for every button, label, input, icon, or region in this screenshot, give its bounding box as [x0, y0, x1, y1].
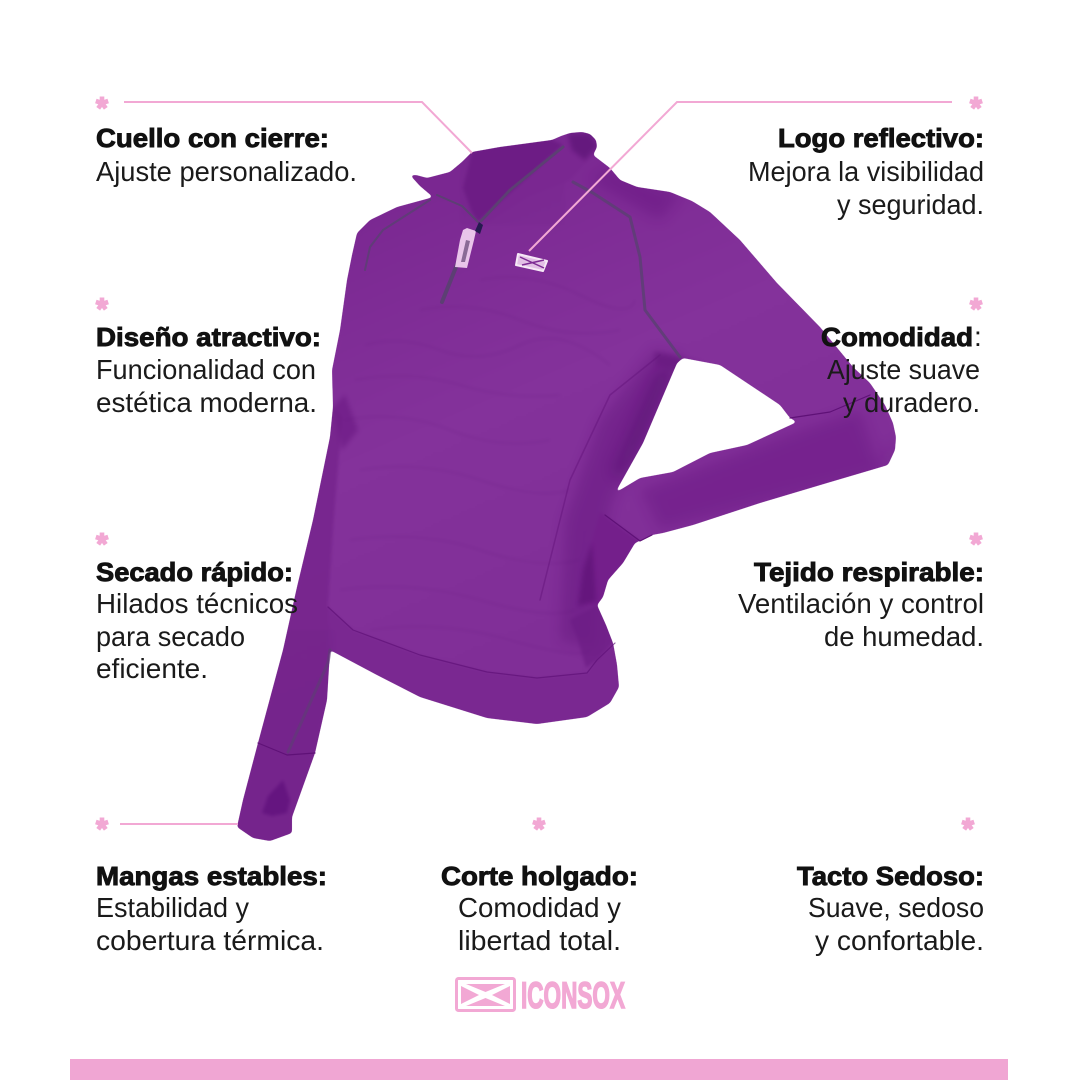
- text: logo reflectivo: y seguridad.: [837, 189, 984, 220]
- text: tacto sedoso: y confortable.: [815, 925, 984, 956]
- text: corte holgado: Comodidad y: [458, 892, 621, 923]
- shirt body with shading: [235, 132, 896, 845]
- collar: [412, 152, 473, 196]
- leader line: cuello: [124, 102, 472, 153]
- text: diseño atractivo: Diseño atractivo:: [96, 322, 321, 352]
- leader line: logo: [529, 102, 952, 251]
- text: logo reflectivo: Mejora la visibilidad: [748, 156, 984, 187]
- text: comodidad: [821, 321, 982, 418]
- text: comodidad: Ajuste suave: [827, 354, 980, 385]
- zipper pull: [455, 222, 483, 268]
- brand logo: [456, 975, 625, 1016]
- text: corte holgado: [441, 861, 638, 956]
- cuff ribbing and thumb hole: [276, 676, 277, 677]
- text: tejido respirable: [738, 557, 984, 652]
- text: mangas estables: cobertura térmica.: [96, 925, 324, 956]
- bottom bar: [70, 1059, 1008, 1080]
- text: secado rápido: Hilados técnicos: [96, 588, 298, 619]
- text: secado rápido: eficiente.: [96, 653, 208, 684]
- text: tejido respirable: Ventilación y control: [738, 588, 984, 619]
- text: cuello con cierre: Cuello con cierre:: [96, 123, 329, 153]
- logo wordmark: ICONSOX: [521, 975, 625, 1016]
- fabric wrinkles: [340, 277, 635, 653]
- text: logo reflectivo: [748, 123, 984, 220]
- logo icon: [456, 978, 514, 1010]
- text: secado rápido: [96, 557, 298, 684]
- text: tacto sedoso: Suave, sedoso: [808, 892, 984, 923]
- hem ribbing: [331, 643, 619, 724]
- text: secado rápido: Secado rápido:: [96, 557, 293, 587]
- text: tejido respirable: Tejido respirable:: [754, 557, 984, 587]
- text: tejido respirable: de humedad.: [824, 621, 984, 652]
- text: secado rápido: para secado: [96, 621, 245, 652]
- text: tacto sedoso: Tacto Sedoso:: [797, 861, 984, 891]
- text: diseño atractivo: estética moderna.: [96, 387, 317, 418]
- text: comodidad: :: [974, 321, 982, 352]
- text: mangas estables: [96, 861, 327, 956]
- text: diseño atractivo: [96, 322, 321, 418]
- leader line: mangas: [120, 823, 238, 825]
- seams: [258, 147, 870, 755]
- text: comodidad: y duradero.: [843, 387, 980, 418]
- text: logo reflectivo: Logo reflectivo:: [778, 123, 984, 153]
- text: tacto sedoso: [797, 861, 984, 956]
- text: comodidad: Comodidad: [821, 322, 973, 352]
- text: diseño atractivo: Funcionalidad con: [96, 354, 316, 385]
- text: corte holgado: libertad total.: [458, 925, 621, 956]
- text: mangas estables: Estabilidad y: [96, 892, 249, 923]
- text: cuello con cierre: [96, 123, 357, 187]
- text: corte holgado: Corte holgado:: [441, 861, 638, 891]
- shirt: [235, 132, 896, 845]
- text: mangas estables: Mangas estables:: [96, 861, 327, 891]
- text: cuello con cierre: Ajuste personalizado.: [96, 156, 357, 187]
- chest logo: [516, 254, 547, 271]
- asterisks: [96, 96, 982, 829]
